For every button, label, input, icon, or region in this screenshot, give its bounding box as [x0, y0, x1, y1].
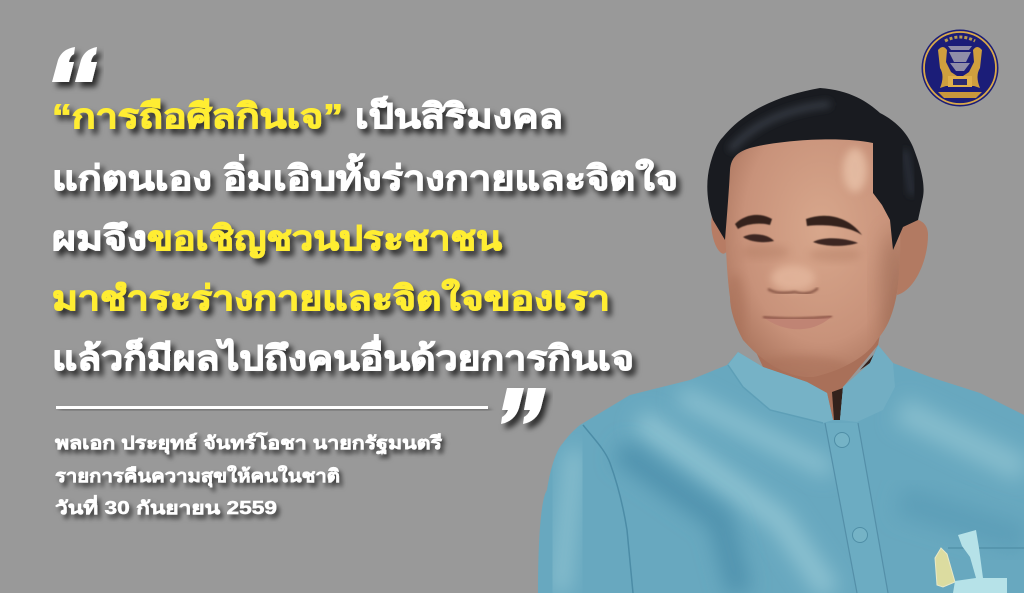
eyes: [743, 234, 774, 242]
hair highlight: [730, 104, 830, 150]
speaker name: พลเอก ประยุทธ์ จันทร์โอชา นายกรัฐมนตรี: [55, 432, 442, 455]
attribution text: [55, 432, 442, 518]
quote line 2: แก่ตนเอง อิ่มเอิบทั้งร่างกายและจิตใจ: [52, 153, 678, 198]
portrait of speaker: [538, 88, 1024, 593]
quote line 1: [52, 95, 563, 136]
icon: government seal: [922, 30, 998, 106]
nose: [771, 265, 815, 291]
neck: [748, 335, 880, 422]
pocket badge: [935, 548, 955, 587]
quote line 5: แล้วก็มีผลไปถึงคนอื่นด้วยการกินเจ: [52, 334, 634, 378]
hair: [707, 88, 924, 250]
cheek shading: [874, 231, 900, 334]
jacket: [538, 345, 1024, 593]
collar: [728, 352, 833, 423]
quote line 3: ขอเชิญชวนประชาชน: [147, 220, 502, 259]
opening quote mark: [52, 47, 97, 82]
quote line 3: [52, 220, 502, 259]
face: [726, 139, 900, 374]
jacket sheen: [560, 395, 1024, 593]
ears: [708, 209, 732, 255]
quote line 4: มาชำระร่างกายและจิตใจของเรา: [52, 278, 610, 318]
button placket: [825, 423, 888, 593]
divider line: [56, 406, 488, 409]
eyebrows: [735, 215, 772, 229]
breast pocket: [948, 547, 1024, 549]
quote line 1: เป็นสิริมงคล: [355, 95, 563, 136]
quote text block: [52, 47, 678, 378]
mouth: [763, 316, 832, 329]
programme name: รายการคืนความสุขให้คนในชาติ: [55, 465, 340, 488]
quote line 3: ผมจึง: [52, 220, 147, 258]
forehead highlight: [843, 148, 867, 192]
date: วันที่ 30 กันยายน 2559: [55, 495, 277, 518]
buttons: [834, 432, 850, 448]
name card clip: [953, 530, 1007, 593]
quote line 1: “การถือศีลกินเจ”: [52, 98, 343, 136]
closing quote mark: [501, 388, 546, 424]
